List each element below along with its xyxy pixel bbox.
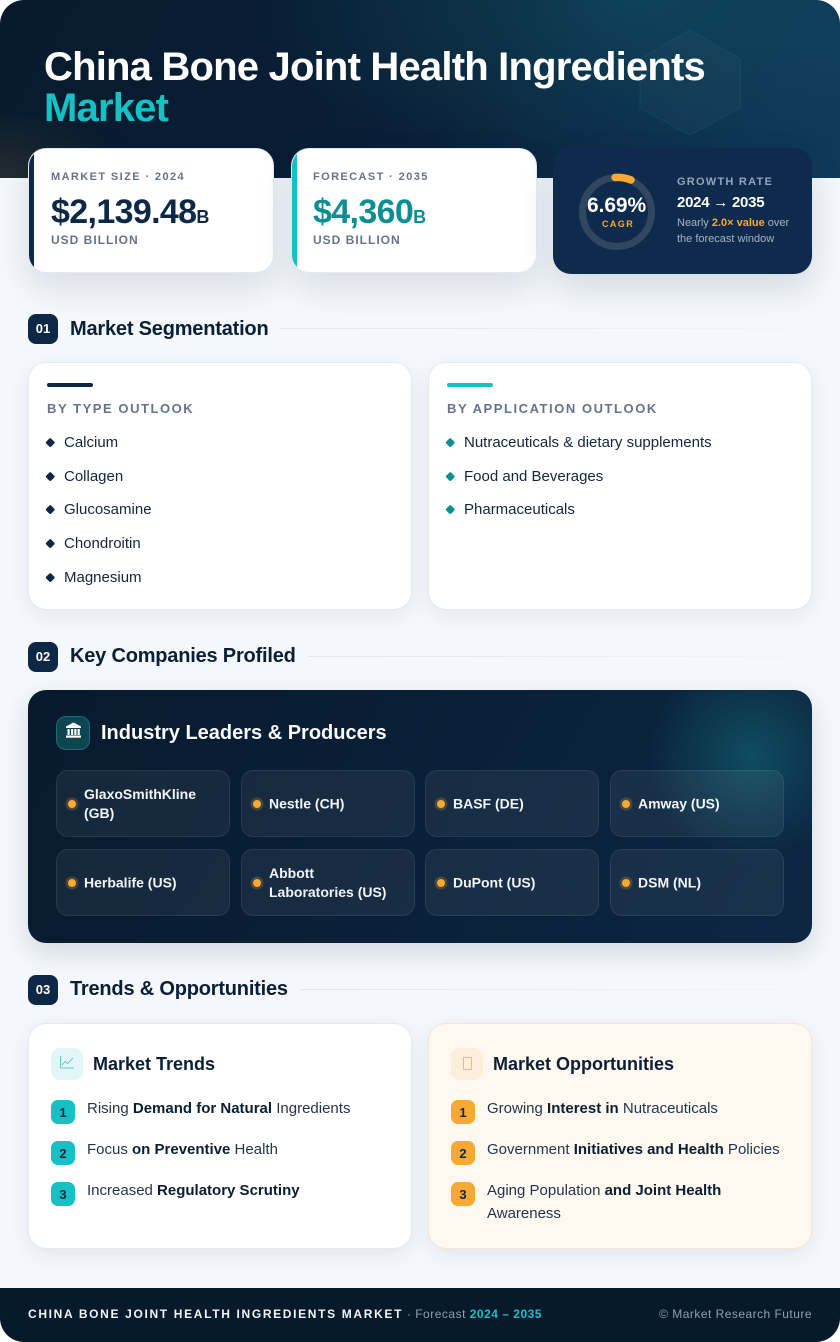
panel: by type outlook: Chondroitin (64, 535, 141, 552)
heading: key companies: Key Companies Profiled (70, 645, 296, 667)
stat card: growth rate: 6.69% (587, 194, 646, 217)
icon: chart (51, 1048, 83, 1080)
panel: market trends: 1 (59, 1105, 67, 1120)
panel: market opportunities (428, 1023, 812, 1249)
heading: trends: Trends & Opportunities (70, 978, 288, 1000)
panel: by application outlook: BY APPLICATION OUTLOOK (447, 401, 658, 416)
stat card: market size: MARKET SIZE · 2024 (51, 171, 185, 183)
panel: market trends (28, 1023, 412, 1249)
panel: market opportunities: Aging Population and Joint Health (487, 1182, 721, 1199)
panel: market trends: 2 (59, 1146, 67, 1161)
company chips: GlaxoSmithKline (84, 786, 196, 802)
panel: market trends: 3 (59, 1187, 67, 1202)
panel: industry leaders (28, 690, 812, 943)
heading: market segmentation: Market Segmentation (70, 318, 268, 340)
stat card: growth rate: Nearly 2.0× value over (677, 217, 789, 229)
title (44, 45, 705, 130)
title: China Bone Joint Health Ingredients (44, 45, 705, 89)
company chips: Abbott (269, 864, 314, 880)
company chips (56, 770, 784, 916)
section number 02 (28, 642, 58, 672)
company chips: Amway (US) (638, 795, 720, 811)
section number 01 (28, 314, 58, 344)
section number 03: 03 (36, 982, 50, 997)
panel: market opportunities: 3 (459, 1187, 467, 1202)
decorative hexagon (640, 30, 740, 136)
panel: by type outlook: Collagen (64, 468, 123, 485)
company chips: Nestle (CH) (269, 795, 344, 811)
section number 02: 02 (36, 649, 50, 664)
panel: by application outlook: Pharmaceuticals (464, 501, 575, 518)
panel: market opportunities: Growing Interest in Nutraceuticals (487, 1100, 718, 1117)
stat card: market size (28, 148, 274, 273)
company chips: DuPont (US) (453, 874, 535, 890)
panel: market trends: Focus on Preventive Health (87, 1141, 278, 1158)
company chips: BASF (DE) (453, 795, 524, 811)
panel: market opportunities: Market Opportunities (493, 1054, 674, 1074)
company chips: (GB) (84, 804, 114, 820)
panel: by type outlook (28, 362, 412, 610)
panel: by application outlook (428, 362, 812, 610)
CAGR ring (579, 174, 655, 250)
section number 01: 01 (36, 321, 50, 336)
panel: market trends: Rising Demand for Natural Ingredients (87, 1100, 350, 1117)
stat card: growth rate (553, 148, 812, 274)
stat card: growth rate: 2024 → 2035 (677, 194, 764, 211)
title: Market (44, 86, 168, 130)
footer (0, 1288, 840, 1342)
panel: by type outlook: Magnesium (64, 569, 142, 586)
footer: CHINA BONE JOINT HEALTH INGREDIENTS MARKET · Forecast 2024 – 2035 (28, 1307, 542, 1321)
panel: by type outlook: Calcium (64, 434, 118, 451)
panel: by type outlook: BY TYPE OUTLOOK (47, 401, 194, 416)
header banner (0, 0, 840, 178)
panel: market opportunities: 1 (459, 1105, 467, 1120)
panel: by application outlook: Food and Beverages (464, 468, 603, 485)
icon: institution (56, 716, 90, 750)
section number 03 (28, 975, 58, 1005)
stat card: forecast (291, 148, 537, 273)
panel: by type outlook: Glucosamine (64, 501, 152, 518)
stat card: market size: USD BILLION (51, 233, 139, 247)
panel: market opportunities: 2 (459, 1146, 467, 1161)
stat card: forecast: FORECAST · 2035 (313, 171, 429, 183)
stat card: forecast: USD BILLION (313, 233, 401, 247)
company chips: Herbalife (US) (84, 874, 177, 890)
stat card: forecast: $4,360B (313, 193, 426, 231)
stat card: growth rate: GROWTH RATE (677, 176, 773, 188)
icon: missing glyph (451, 1048, 483, 1080)
stat card: growth rate: the forecast window (677, 233, 774, 245)
panel: market trends: Market Trends (93, 1054, 215, 1074)
stat card: growth rate: CAGR (602, 219, 634, 229)
panel: market opportunities: Government Initiatives and Health Policies (487, 1141, 780, 1158)
company chips: DSM (NL) (638, 874, 701, 890)
company chips: Laboratories (US) (269, 884, 386, 900)
panel: by application outlook: Nutraceuticals & dietary supplements (464, 434, 712, 451)
panel: market opportunities: Awareness (487, 1205, 561, 1222)
panel heading: Industry Leaders & Producers (101, 722, 387, 744)
stat card: market size: $2,139.48B (51, 193, 209, 231)
footer: © Market Research Future (659, 1307, 812, 1321)
panel: market trends: Increased Regulatory Scrutiny (87, 1182, 300, 1199)
